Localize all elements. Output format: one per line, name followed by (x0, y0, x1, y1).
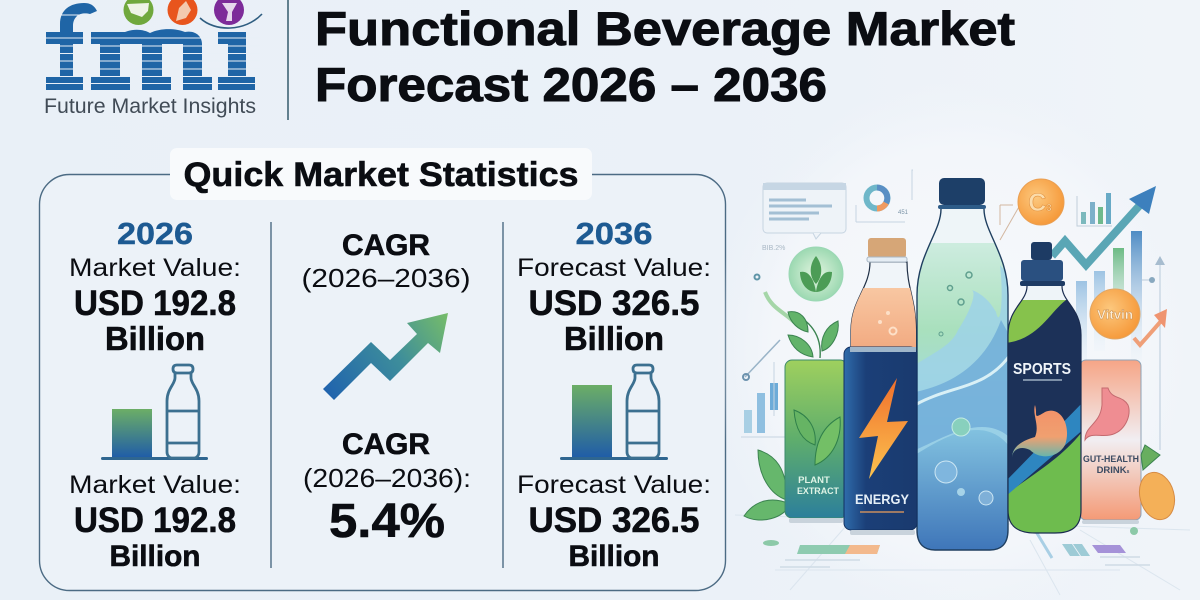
forecast value top (517, 254, 711, 357)
energy can: ENERGY (855, 491, 910, 507)
market value top: Market Value: (69, 254, 241, 282)
column: 2026 (69, 216, 241, 573)
panel frame (40, 174, 726, 590)
plant extract can (785, 360, 847, 523)
floor lines and swatches (735, 510, 1190, 595)
market value top: Billion (105, 320, 205, 357)
market value bottom: USD 192.8 (74, 501, 236, 540)
panel heading pill (170, 148, 592, 200)
illustration: functional beverages (724, 170, 1190, 595)
icon: growth arrow (323, 313, 448, 400)
logo: Future Market Insights (44, 0, 262, 118)
CAGR value (303, 428, 471, 548)
leaf orb (789, 247, 843, 301)
forecast value bottom (517, 471, 711, 573)
logo globes (124, 0, 262, 28)
vitamin bubble (1090, 289, 1140, 339)
big water bottle (916, 178, 1009, 551)
header divider (287, 0, 289, 120)
leaf sprout (765, 292, 838, 358)
gut health can: DRINKs (1097, 465, 1130, 476)
forecast value top: Forecast Value: (517, 254, 711, 282)
gut health can: GUT-HEALTH (1083, 454, 1139, 465)
CAGR value: CAGR (342, 428, 430, 461)
sports bottle: SPORTS (1013, 361, 1071, 378)
CAGR value: (2026–2036): (303, 463, 471, 493)
side leaves (744, 450, 790, 520)
column: 2036 (517, 216, 711, 573)
logo stripes (44, 15, 260, 84)
logo wordmark: Future Market Insights (44, 94, 256, 118)
market value bottom: Market Value: (69, 471, 241, 499)
title: Forecast 2026 – 2036 (315, 58, 827, 111)
left bars (741, 274, 790, 437)
forecast value bottom: USD 326.5 (528, 501, 700, 540)
panel: quick market statistics (40, 148, 726, 590)
note bracket (856, 170, 913, 222)
CAGR value: 5.4% (329, 495, 445, 548)
small left stats: BIB.2% (762, 245, 785, 252)
market value top (69, 254, 241, 357)
icon: bar and bottle 2026 (101, 365, 208, 460)
year 2026: 2026 (117, 216, 193, 251)
orange juice bottle (850, 238, 916, 350)
plant extract can: EXTRACT (797, 486, 839, 497)
forecast value bottom: Billion (568, 540, 660, 573)
fruit (1134, 445, 1180, 524)
icon: bar and bottle 2036 (560, 365, 668, 460)
panel heading pill: Quick Market Statistics (184, 156, 578, 194)
energy can (844, 347, 917, 535)
chart card (763, 183, 846, 239)
title: Functional Beverage Market (315, 2, 1015, 55)
donut chart (866, 188, 888, 208)
plant extract can: PLANT (798, 475, 830, 486)
background glow (710, 80, 1200, 600)
CAGR top label (302, 229, 470, 293)
vitamin bubble: Vitvin (1097, 307, 1133, 322)
column dividers (271, 222, 503, 568)
market value bottom (69, 471, 241, 573)
small orange arrow (1134, 309, 1167, 345)
gut health can (1080, 360, 1141, 524)
year 2036: 2036 (576, 216, 652, 251)
sports bottle (1005, 242, 1085, 535)
vitamin C bubble (1000, 179, 1064, 240)
title (315, 2, 1015, 111)
forecast value top: USD 326.5 (528, 284, 700, 323)
vitamin C bubble: C3 (1028, 189, 1052, 217)
CAGR top label: CAGR (342, 229, 430, 262)
growth arrow (1052, 186, 1156, 265)
market value bottom: Billion (110, 540, 200, 573)
column: CAGR (302, 229, 471, 548)
small top bar chart (1077, 193, 1112, 226)
right background bars (1076, 231, 1165, 450)
logo letters fmi (46, 3, 255, 90)
market value top: USD 192.8 (74, 284, 236, 323)
forecast value top: Billion (564, 320, 664, 357)
CAGR top label: (2026–2036) (302, 263, 470, 293)
small note 451: 451 (898, 210, 909, 216)
forecast value bottom: Forecast Value: (517, 471, 711, 499)
